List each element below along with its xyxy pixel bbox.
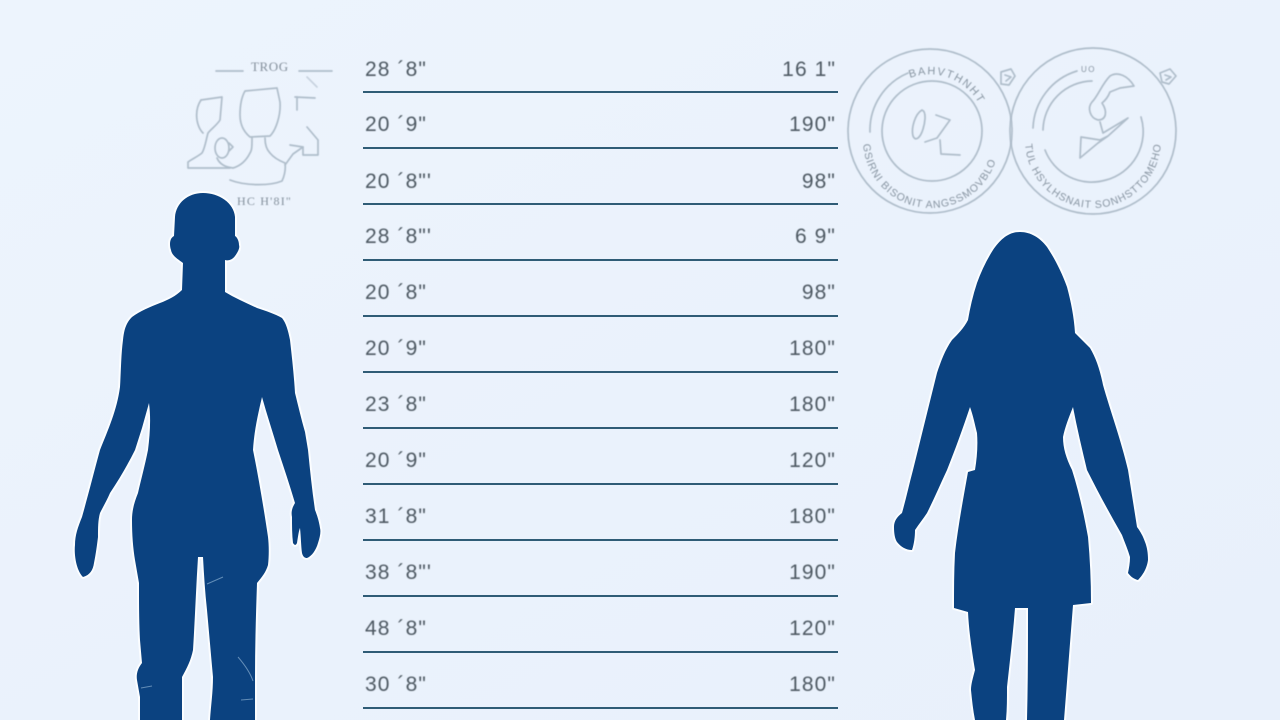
left column values: 20 ´9" xyxy=(365,449,427,472)
height table xyxy=(363,58,838,708)
left column values: 28 ´8"' xyxy=(365,225,432,248)
icon: head outlines xyxy=(188,77,318,185)
left column values: 20 ´8"' xyxy=(365,170,432,193)
right column values: 190" xyxy=(789,113,836,136)
badge top lettering: BAHVTHNHT xyxy=(908,66,986,101)
circle rings xyxy=(1010,48,1176,214)
badge top lettering: UO xyxy=(1081,65,1096,74)
right column values: 180" xyxy=(789,505,836,528)
icon: abstract bird mark xyxy=(1080,74,1134,158)
right column values: 120" xyxy=(789,617,836,640)
faint strokes on the male legs xyxy=(141,577,253,700)
icon: small seal xyxy=(1001,69,1015,85)
icon label: TROG xyxy=(251,59,289,74)
badge: left circle xyxy=(846,48,1016,214)
left column values: 28 ´8" xyxy=(365,58,427,81)
left column values xyxy=(365,58,432,696)
small caption: HC H'8I" xyxy=(237,194,292,208)
right column values: 98" xyxy=(802,281,836,304)
right column values: 6 9" xyxy=(795,225,836,248)
left column values: 31 ´8" xyxy=(365,505,427,528)
badge bottom lettering: GSIRNI BISONIT ANGSSMOVBLO xyxy=(862,144,996,208)
right column values: 16 1" xyxy=(782,58,836,81)
icon: small seal xyxy=(1160,69,1176,84)
male silhouette xyxy=(75,193,320,720)
badge: right circle xyxy=(1008,46,1178,216)
right column values: 180" xyxy=(789,673,836,696)
left column values: 48 ´8" xyxy=(365,617,427,640)
left column values: 23 ´8" xyxy=(365,393,427,416)
left column values: 30 ´8" xyxy=(365,673,427,696)
right column values: 190" xyxy=(789,561,836,584)
left column values: 20 ´9" xyxy=(365,113,427,136)
right column values: 180" xyxy=(789,393,836,416)
right column values: 98" xyxy=(802,170,836,193)
icon label xyxy=(216,59,332,74)
right column values: 120" xyxy=(789,449,836,472)
row lines xyxy=(363,92,838,708)
icon: letter glyph mark xyxy=(912,110,960,155)
right column values: 180" xyxy=(789,337,836,360)
left column values: 20 ´8" xyxy=(365,281,427,304)
right column values xyxy=(782,58,836,696)
left column values: 38 ´8"' xyxy=(365,561,432,584)
head outline icon group xyxy=(188,59,332,208)
badge bottom lettering: TUL HSYLHSNAIT SONHSTTOMEHO xyxy=(1025,143,1161,208)
circle rings xyxy=(848,49,1012,213)
female silhouette xyxy=(894,232,1148,720)
left column values: 20 ´9" xyxy=(365,337,427,360)
